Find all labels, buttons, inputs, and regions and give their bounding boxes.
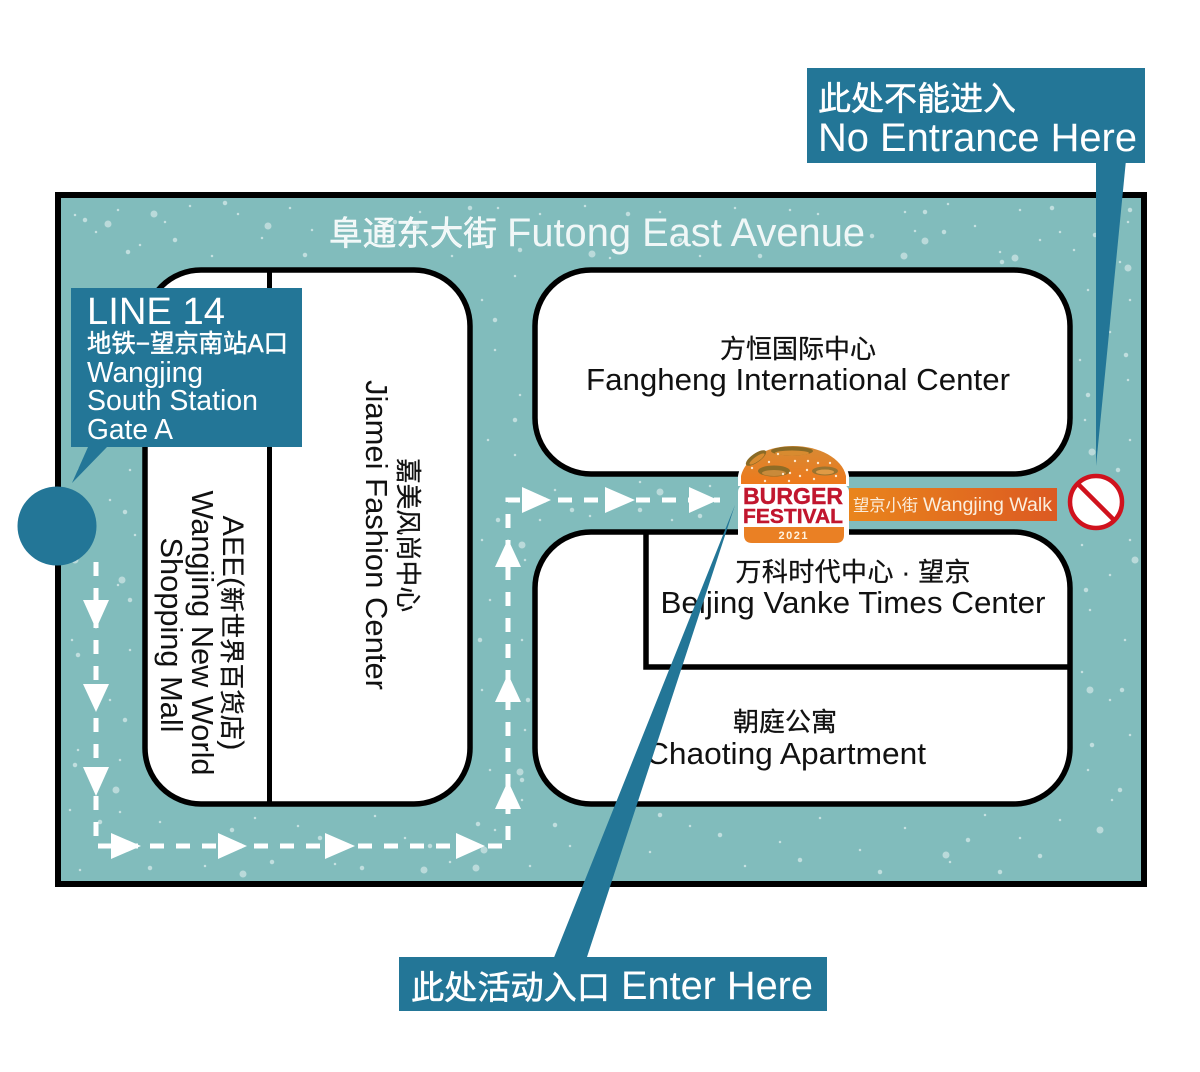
label: Jiamei Fashion Center: 嘉美风尚中心 <box>393 458 423 612</box>
callout: no entrance: No Entrance Here <box>818 116 1137 160</box>
label: Vanke: Beijing Vanke Times Center <box>660 585 1046 620</box>
speckle pattern <box>70 203 1135 874</box>
label: Wangjing Walk: 望京小街 <box>853 497 918 515</box>
callout: Line 14 station: Gate A <box>87 414 173 446</box>
logo: Burger Festival 2021: FESTIVAL <box>743 506 843 528</box>
callout: event entrance: Enter Here <box>621 964 813 1008</box>
label: Fangheng: 方恒国际中心 <box>720 334 876 364</box>
label: Wangjing Walk <box>849 488 1057 521</box>
arrows: route direction <box>83 487 718 859</box>
logo: Burger Festival 2021: BURGER <box>743 483 843 509</box>
label: Chaoting: 朝庭公寓 <box>733 707 837 737</box>
callout: event entrance <box>399 505 827 1011</box>
icon: station marker <box>18 486 96 566</box>
callout: Line 14 station: South Station <box>87 385 258 417</box>
logo: Burger Festival 2021 <box>738 444 849 545</box>
label: AEE mall: AEE( 新世界百货店 ) <box>216 515 249 751</box>
label: Chaoting: Chaoting Apartment <box>646 736 926 771</box>
panel: Fangheng building <box>535 270 1070 474</box>
icon: no entry sign <box>1070 476 1122 528</box>
callout: no entrance: 此处不能进入 <box>818 80 1016 117</box>
label: AEE mall <box>154 490 249 776</box>
panel: map area <box>58 195 1144 884</box>
callout: event entrance: 此处活动入口 <box>411 969 610 1006</box>
callout: Line 14 station: LINE 14 <box>87 291 225 333</box>
label: Wangjing Walk: Wangjing Walk <box>923 495 1052 516</box>
label: Chaoting <box>646 707 926 771</box>
callout: no entrance <box>807 68 1145 466</box>
sesame seeds <box>752 454 836 481</box>
label: Fangheng: Fangheng International Center <box>586 362 1010 397</box>
title: street name <box>329 211 865 255</box>
label: AEE mall: Shopping Mall <box>154 538 189 732</box>
route: dashed walking path <box>83 487 720 859</box>
panel: left building block <box>145 270 470 804</box>
label: Jiamei Fashion Center: Jiamei Fashion Center <box>359 380 394 690</box>
label: Vanke: 万科时代中心 · 望京 <box>736 557 970 587</box>
panel: Vanke and Chaoting building <box>535 532 1070 804</box>
callout: Line 14 station: Wangjing <box>87 357 203 389</box>
logo: Burger Festival 2021: 2021 <box>778 530 808 542</box>
label: Fangheng <box>586 334 1010 397</box>
title: street name: 阜通东大街 <box>329 216 497 253</box>
label: Jiamei Fashion Center <box>359 380 423 690</box>
label: Vanke <box>660 557 1046 620</box>
callout: Line 14 station: 地铁−望京南站A口 <box>87 330 288 358</box>
title: street name: Futong East Avenue <box>507 211 865 255</box>
callout: Line 14 station <box>71 288 302 483</box>
label: AEE mall: Wangjing New World <box>185 490 220 776</box>
